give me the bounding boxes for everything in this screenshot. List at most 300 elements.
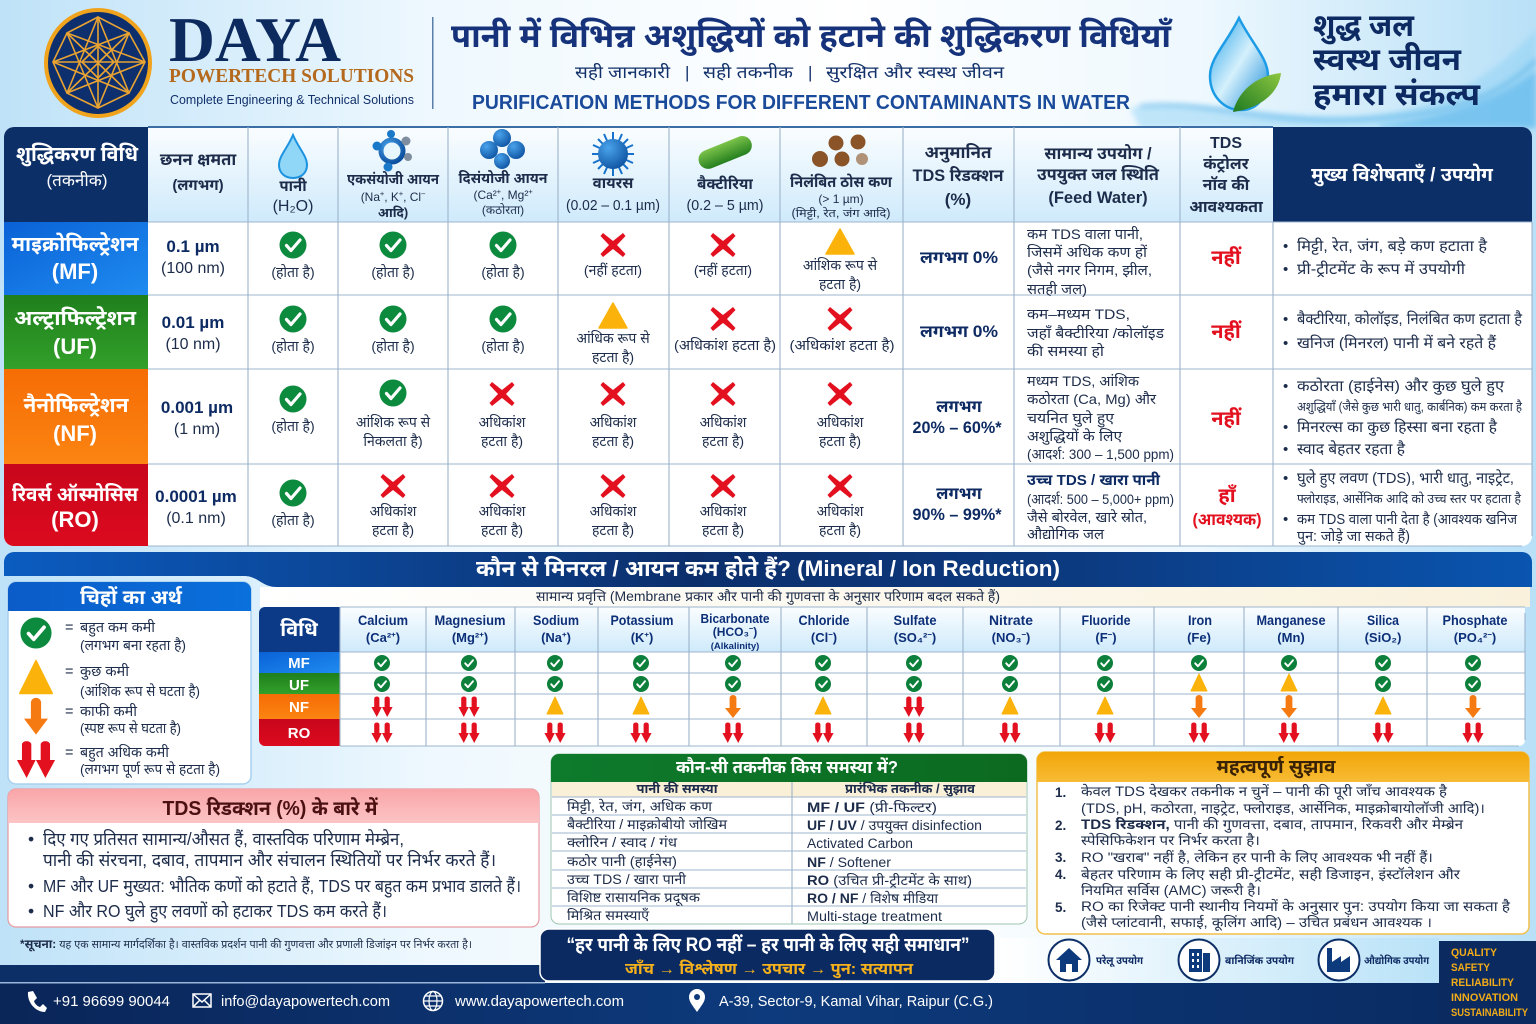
UF row marks: (होता है) <box>371 338 415 354</box>
suggestion list: केवल TDS देखकर तकनीक न चुनें – पानी की पूरी जाँच आवश्यक है <box>1081 782 1448 801</box>
UF mineral marks <box>374 674 1481 692</box>
column: TDS controller: कंट्रोलर <box>1203 155 1250 173</box>
UF row marks: आंधिक रूप से <box>576 329 650 346</box>
main title: | <box>685 63 689 82</box>
UF row marks: (अधिकांश हटता है) <box>674 337 776 353</box>
mineral column headers: Sodium <box>533 612 579 628</box>
mineral column headers <box>358 612 1508 652</box>
method column cells: UF <box>289 677 309 694</box>
RO mineral marks <box>371 722 1484 743</box>
row label: NF: (NF) <box>53 421 97 446</box>
slogan box: जाँच → विश्लेषण → उपचार → पुन: सत्यापन <box>625 959 914 979</box>
feed water text: जैसे बोरवेल, खारे स्रोत, <box>1027 508 1147 525</box>
icon: commercial use: बानिजिंक उपयोग <box>1225 954 1295 967</box>
RO row marks: हटता है) <box>702 522 744 538</box>
main features bullets: • <box>1283 511 1288 528</box>
feed water text: (आदर्श: 300 – 1,500 ppm) <box>1027 446 1174 462</box>
main features bullets: • <box>1283 419 1288 436</box>
contact: website: www.dayapowertech.com <box>454 994 624 1010</box>
TDS reduction values: 90% – 99%* <box>912 506 1002 524</box>
suggested technologies: RO / NF / विशेष मीडिया <box>807 889 939 906</box>
TDS reduction values: लगभग 0% <box>920 323 998 341</box>
column: general use: (Feed Water) <box>1048 189 1148 207</box>
use cases strip <box>1048 940 1429 980</box>
icon: industrial use <box>1318 940 1429 980</box>
UF row marks: (होता है) <box>271 338 315 354</box>
legend: orange arrow: काफी कमी <box>80 703 137 720</box>
slogan top right: शुद्ध जल <box>1313 8 1415 45</box>
filtration capacity values: (1 nm) <box>174 421 220 438</box>
MF row marks: हटता है) <box>819 276 861 292</box>
mineral column headers: Chloride <box>798 612 850 628</box>
column: suspended solids: निलंबित ठोस कण <box>790 174 893 191</box>
footer band <box>0 965 1536 1024</box>
MF row marks: (नहीं हटता) <box>694 262 752 278</box>
brand name: DAYA <box>169 4 341 75</box>
main title: | <box>808 63 812 82</box>
column: divalent ions: (Ca²⁺, Mg²⁺ <box>473 188 533 202</box>
suggestion list: 4. <box>1055 867 1066 882</box>
RO row marks: हटता है) <box>481 522 523 538</box>
brand name <box>169 4 414 107</box>
values box <box>1439 941 1536 1024</box>
column: monovalent ions: आदि) <box>378 205 408 220</box>
main features bullets: बैक्टीरिया, कोलॉइड, निलंबित कण हटाता है <box>1297 311 1523 328</box>
mineral column headers: Silica <box>1367 612 1399 628</box>
feed water text: उच्च TDS / खारा पानी <box>1027 472 1161 489</box>
NF row marks: हटता है) <box>592 433 634 449</box>
main title: सही जानकारी <box>575 62 671 82</box>
water problems: क्लोरिन / स्वाद / गंध <box>567 834 678 850</box>
legend: orange arrow <box>24 698 181 736</box>
column: TDS reduction: अनुमानित <box>924 142 992 163</box>
NF row marks: हटता है) <box>481 433 523 449</box>
mineral column headers: (PO₄²⁻) <box>1454 630 1496 645</box>
mineral column headers: (K⁺) <box>631 630 653 645</box>
panel: important suggestions: महत्वपूर्ण सुझाव <box>1217 755 1336 779</box>
main title: सही तकनीक <box>703 62 794 82</box>
panel: legend <box>8 582 251 784</box>
MF row marks: (होता है) <box>271 264 315 280</box>
TDS note bullets: • <box>28 876 34 896</box>
main features bullets: प्री-ट्रीटमेंट के रूप में उपयोगी <box>1297 260 1466 278</box>
suggestion list: बेहतर परिणाम के लिए सही प्री-ट्रीटमेंट, सही डिजाइन, इंस्टॉलेशन और <box>1081 865 1461 883</box>
NF row marks: निकलता है) <box>363 433 423 449</box>
NF row marks: हटता है) <box>819 433 861 449</box>
suggested technologies: Multi-stage treatment <box>807 909 942 924</box>
feed water text: जहाँ बैक्टीरिया /कोलॉइड <box>1027 324 1165 341</box>
method column cells <box>259 607 340 746</box>
suggestion list: (TDS, pH, कठोरता, नाइट्रेट, फ्लोराइड, आर्सेनिक, माइक्रोबायोलॉजी आदि)। <box>1081 799 1485 817</box>
RO row marks: (होता है) <box>271 512 315 528</box>
TDS note bullets: • <box>28 901 34 921</box>
row label: MF: माइक्रोफिल्ट्रेशन <box>12 232 140 256</box>
row label: MF: (MF) <box>52 259 98 284</box>
method column cells: NF <box>289 699 309 716</box>
column: general use: उपयुक्त जल स्थिति <box>1037 166 1160 185</box>
RO row marks <box>271 474 864 538</box>
column: divalent ions <box>458 129 548 217</box>
TDS note bullets: MF और UF मुख्यत: भौतिक कणों को हटाते हैं, TDS पर बहुत कम प्रभाव डालते हैं। <box>43 875 521 898</box>
feed water text <box>1027 226 1174 542</box>
feed water text: मध्यम TDS, आंशिक <box>1027 373 1139 389</box>
heading: filtration capacity: छनन क्षमता <box>160 151 237 169</box>
MF row marks <box>271 229 878 292</box>
main features bullets: फ्लोराइड, आर्सेनिक आदि को उच्च स्तर पर हटाता है <box>1297 491 1522 506</box>
panel: main comparison table <box>4 126 1532 546</box>
mineral column headers: (SO₄²⁻) <box>894 630 936 645</box>
method column cells: विधि <box>280 617 319 641</box>
RO row marks: अधिकांश <box>479 503 526 519</box>
TDS controller values: हाँ <box>1218 483 1237 507</box>
column: bacteria <box>686 133 764 214</box>
water problems: मिश्रित समस्याएँ <box>567 906 650 923</box>
mineral column headers: (Mn) <box>1277 630 1305 645</box>
suggested technologies: Activated Carbon <box>807 836 913 851</box>
mineral column headers: Fluoride <box>1082 612 1131 628</box>
method column cells: RO <box>288 725 311 742</box>
mineral column headers: Nitrate <box>989 612 1033 628</box>
main features bullets: कठोरता (हाईनेस) और कुछ घुले हुए <box>1297 377 1505 396</box>
contact: website <box>424 992 624 1010</box>
mineral column headers: Phosphate <box>1442 612 1508 628</box>
TDS note bullets: दिए गए प्रतिसत सामान्य/औसत हैं, वास्तविक परिणाम मेम्ब्रेन, <box>43 828 404 849</box>
NF row marks <box>271 380 864 449</box>
RO row marks: हटता है) <box>592 522 634 538</box>
contact: address: A-39, Sector-9, Kamal Vihar, Raipur (C.G.) <box>719 994 993 1010</box>
suggested technologies: UF / UV / उपयुक्त disinfection <box>807 818 982 835</box>
filtration capacity values: 0.001 µm <box>161 398 233 417</box>
mineral column headers: (SiO₂) <box>1365 630 1401 645</box>
main features bullets: मिनरल्स का कुछ हिस्सा बना रहता है <box>1297 419 1498 437</box>
column: monovalent ions: (Na⁺, K⁺, Cl⁻ <box>361 190 426 204</box>
main features bullets: • <box>1283 470 1288 487</box>
brand name: Complete Engineering & Technical Solutions <box>170 93 414 107</box>
mineral column headers: (Cl⁻) <box>811 630 837 645</box>
UF row marks: हटता है) <box>592 349 634 365</box>
mineral column headers: Potassium <box>610 612 674 628</box>
heading: method: (तकनीक) <box>47 170 107 190</box>
feed water text: चयनित घुले हुए <box>1027 409 1114 428</box>
mineral column headers: (NO₃⁻) <box>992 630 1030 645</box>
problem table heads: पानी की समस्या <box>636 781 719 796</box>
TDS controller values: नहीं <box>1211 320 1242 343</box>
MF row marks: (होता है) <box>481 264 525 280</box>
suggestion list: RO का रिजेक्ट पानी स्थानीय नियमों के अनुसार पुन: उपयोग किया जा सकता है <box>1081 897 1511 916</box>
column: virus <box>566 132 660 214</box>
column: TDS reduction: TDS रिडक्शन <box>912 165 1004 185</box>
MF row marks: (नहीं हटता) <box>584 262 642 278</box>
values box: SAFETY <box>1451 962 1491 974</box>
main features bullets: कम TDS वाला पानी देता है (आवश्यक खनिज <box>1297 510 1517 528</box>
suggested technologies: NF / Softener <box>807 855 892 870</box>
legend: orange arrow: = <box>65 704 73 720</box>
row label: MF <box>4 222 148 295</box>
filtration capacity values: (10 nm) <box>165 336 221 353</box>
problem table heads <box>636 781 976 798</box>
heading: filtration capacity <box>160 151 237 194</box>
TDS reduction values: लगभग <box>936 398 983 416</box>
panel: mineral ion reduction banner: कौन से मिनरल / आयन कम होते हैं? (Mineral / Ion Reduction) <box>476 556 1060 581</box>
table grid lines <box>148 127 1532 546</box>
mineral column headers: (Mg²⁺) <box>452 630 488 645</box>
slogan top right <box>1313 8 1481 112</box>
legend: red double arrow: (लगभग पूर्ण रूप से हटता है) <box>80 760 220 779</box>
mineral table subtitle strip <box>260 587 1530 607</box>
TDS reduction values: 20% – 60%* <box>912 419 1002 437</box>
panel: which technology for which problem: कौन-सी तकनीक किस समस्या में? <box>676 757 898 777</box>
chart: mineral matrix <box>259 607 1525 746</box>
header: water splash <box>1130 30 1536 128</box>
MF row marks: आंशिक रूप से <box>803 256 878 273</box>
contact: address <box>689 989 993 1012</box>
legend: triangle: कुछ कमी <box>80 663 129 681</box>
UF row marks: (होता है) <box>481 338 525 354</box>
filtration capacity values: (100 nm) <box>161 260 225 277</box>
column: TDS controller: TDS <box>1210 135 1242 152</box>
main features bullets <box>1283 237 1523 546</box>
icon: commercial use <box>1178 940 1295 980</box>
slogan box: “हर पानी के लिए RO नहीं – हर पानी के लिए सही समाधान” <box>566 933 970 956</box>
RO row marks: हटता है) <box>372 522 414 538</box>
panel: legend: चिहों का अर्थ <box>80 585 183 609</box>
main features bullets: • <box>1283 378 1288 395</box>
legend: red double arrow: = <box>65 745 73 761</box>
row label: NF: नैनोफिल्ट्रेशन <box>24 393 130 417</box>
mineral column headers: (Ca²⁺) <box>366 630 400 645</box>
panel: which technology for which problem <box>551 754 1027 924</box>
mineral column headers: (Alkalinity) <box>711 641 759 652</box>
suggestion list: 2. <box>1055 818 1066 833</box>
suggestion list: TDS रिडक्शन, पानी की गुणवत्ता, दबाव, तापमान, रिकवरी और मेम्ब्रेन <box>1081 815 1464 834</box>
suggestion list: 5. <box>1055 900 1066 915</box>
slogan top right: स्वस्थ जीवन <box>1313 42 1462 77</box>
heading: method: शुद्धिकरण विधि <box>16 142 138 167</box>
row label: RO: रिवर्स ऑस्मोसिस <box>12 482 139 506</box>
legend: triangle: = <box>65 664 73 680</box>
icon: domestic use <box>1048 940 1143 980</box>
NF row marks: आंशिक रूप से <box>356 413 431 430</box>
row label: UF <box>4 295 148 369</box>
column: bacteria: बैक्टीरिया <box>697 175 753 193</box>
TDS note bullets: पानी की संरचना, दबाव, तापमान और संचालन स्थितियों पर निर्भर करते हैं। <box>43 849 496 870</box>
column: TDS controller: नॉव की <box>1203 175 1250 194</box>
RO row marks: हटता है) <box>819 522 861 538</box>
feed water text: अशुद्धियों के लिए <box>1027 427 1122 446</box>
filtration capacity values <box>155 237 237 527</box>
feed water text: कम–मध्यम TDS, <box>1027 306 1130 322</box>
column: bacteria: (0.2 – 5 µm) <box>686 198 764 214</box>
mineral column headers: Magnesium <box>434 612 506 628</box>
TDS reduction values: लगभग <box>936 485 983 503</box>
suggestion list <box>1055 782 1511 932</box>
filtration capacity values: 0.0001 µm <box>155 487 237 506</box>
slogan top right: हमारा संकल्प <box>1313 77 1481 112</box>
suggested technologies: MF / UF (प्री-फिल्टर) <box>807 799 937 815</box>
column: virus: वायरस <box>593 175 634 192</box>
mineral column headers: Sulfate <box>894 612 937 628</box>
mineral column headers: (Na⁺) <box>541 630 571 645</box>
column: monovalent ions: एकसंयोजी आयन <box>347 171 439 187</box>
icon: industrial use: औद्योगिक उपयोग <box>1364 954 1429 967</box>
feed water text: कम TDS वाला पानी, <box>1027 226 1143 242</box>
water problems: मिट्टी, रेत, जंग, अधिक कण <box>567 797 712 815</box>
main features bullets: • <box>1283 335 1288 352</box>
UF row marks <box>271 303 894 365</box>
main features bullets: मिट्टी, रेत, जंग, बड़े कण हटाता है <box>1297 237 1488 255</box>
column: suspended solids <box>790 134 893 220</box>
footnote: *सूचना: यह एक सामान्य मार्गदर्शिका है। वास्तविक प्रदर्शन पानी की गुणवत्ता और प्रणाली डिजांइन पर निर्भर करता है। <box>20 937 472 952</box>
panel: TDS reduction note <box>8 789 539 927</box>
TDS controller values: (आवश्यक) <box>1192 510 1262 529</box>
feed water text: (आदर्श: 500 – 5,000+ ppm) <box>1027 491 1174 507</box>
column: water: पानी <box>279 178 307 195</box>
TDS note bullets: • <box>28 829 34 849</box>
suggested technologies: RO (उचित प्री-ट्रीटमेंट के साथ) <box>807 871 972 889</box>
legend: strong check: (लगभग बना रहता है) <box>80 637 186 653</box>
contact: phone <box>28 991 170 1012</box>
column: main features: मुख्य विशेषताएँ / उपयोग <box>1311 163 1494 187</box>
feed water text: कठोरता (Ca, Mg) और <box>1027 391 1156 407</box>
legend: strong check <box>20 617 186 653</box>
TDS controller values: नहीं <box>1211 407 1242 430</box>
use cases strip background <box>1000 938 1439 983</box>
main features bullets: घुले हुए लवण (TDS), भारी धातु, नाइट्रेट, <box>1297 469 1514 488</box>
legend: red double arrow <box>17 741 220 779</box>
legend: triangle <box>20 661 200 699</box>
TDS reduction values <box>912 249 1002 524</box>
mineral column headers: Manganese <box>1256 612 1326 628</box>
column: divalent ions: दिसंयोजी आयन <box>458 170 548 186</box>
column: monovalent ions <box>347 130 439 220</box>
filtration capacity values: (0.1 nm) <box>166 510 226 527</box>
row label: RO <box>4 464 148 546</box>
row label: RO: (RO) <box>51 507 99 532</box>
feed water text: सतही जल) <box>1027 281 1087 297</box>
suggested technologies <box>807 799 982 924</box>
legend: strong check: बहुत कम कमी <box>80 619 155 637</box>
column: water <box>273 135 313 215</box>
TDS controller values: नहीं <box>1211 246 1242 269</box>
slogan box <box>540 929 995 981</box>
icon: domestic use: परेलू उपयोग <box>1096 953 1143 968</box>
column: TDS reduction: (%) <box>945 190 971 209</box>
suggestion list: नियमित सर्विस (AMC) जरूरी है। <box>1081 882 1261 898</box>
icon: water drop with leaf <box>1210 18 1281 112</box>
legend: orange arrow: (स्पष्ट रूप से घटता है) <box>80 719 181 736</box>
mineral column headers: (Fe) <box>1187 630 1211 645</box>
MF mineral marks <box>374 655 1481 671</box>
row label: NF <box>4 369 148 464</box>
column: water: (H₂O) <box>273 198 313 215</box>
values box: QUALITY <box>1451 947 1498 959</box>
mineral column headers: Iron <box>1188 612 1212 628</box>
water problems: बैक्टीरिया / माइक्रोबीयो जोखिम <box>567 816 728 832</box>
feed water text: औद्योगिक जल <box>1027 526 1105 542</box>
column: TDS controller <box>1189 135 1263 216</box>
NF row marks: हटता है) <box>702 433 744 449</box>
feed water text: (जैसे नगर निगम, झील, <box>1027 261 1152 278</box>
main features bullets: पुन: जोड़े जा सकते हैं) <box>1297 527 1410 546</box>
TDS reduction values: लगभग 0% <box>920 249 998 267</box>
legend: red double arrow: बहुत अधिक कमी <box>80 744 169 762</box>
RO row marks: अधिकांश <box>370 503 417 519</box>
column: general use: सामान्य उपयोग / <box>1044 145 1152 163</box>
main features bullets: स्वाद बेहतर रहता है <box>1297 440 1406 458</box>
row label: UF: अल्ट्राफिल्ट्रेशन <box>14 306 137 330</box>
suggestion list: स्पेसिफिकेशन पर निर्भर करता है। <box>1081 831 1260 848</box>
NF row marks: अधिकांश <box>590 414 637 430</box>
feed water text: की समस्या हो <box>1027 343 1104 359</box>
legend: strong check: = <box>65 620 73 636</box>
main features bullets: • <box>1283 261 1288 278</box>
main title: पानी में विभिन्न अशुद्धियों को हटाने की शुद्धिकरण विधियाँ <box>451 16 1173 57</box>
RO row marks: अधिकांश <box>590 503 637 519</box>
panel: mineral ion reduction banner <box>4 552 1532 587</box>
column: virus: (0.02 – 0.1 µm) <box>566 198 660 214</box>
NF mineral marks <box>371 695 1481 718</box>
values box: INNOVATION <box>1451 992 1518 1004</box>
mineral column headers: Bicarbonate <box>700 612 770 626</box>
column: divalent ions: (कठोरता) <box>482 202 524 217</box>
column: TDS reduction <box>912 142 1004 209</box>
TDS note bullets: NF और RO घुले हुए लवणों को हटाकर TDS कम करते हैं। <box>43 900 387 923</box>
main features bullets: • <box>1283 311 1288 328</box>
contact: email: info@dayapowertech.com <box>221 994 390 1010</box>
problem table heads: प्रारंभिक तकनीक / सुझाव <box>845 781 976 798</box>
mineral column headers: Calcium <box>358 612 408 628</box>
water problems <box>567 797 728 923</box>
water problems: विशिष्ट रासायनिक प्रदूषक <box>567 889 701 906</box>
filtration capacity values: 0.1 µm <box>166 237 220 256</box>
mineral column headers: (F⁻) <box>1095 630 1117 645</box>
column: general use <box>1037 145 1160 207</box>
brand name: POWERTECH SOLUTIONS <box>169 65 414 87</box>
main features bullets: खनिज (मिनरल) पानी में बने रहते हैं <box>1297 334 1497 352</box>
main features bullets: • <box>1283 238 1288 255</box>
contact: phone: +91 96699 90044 <box>53 994 170 1010</box>
suggestion list: (जैसे प्लांटवानी, सफाई, कूलिंग आदि) – उचित प्रबंधन आवश्यक । <box>1081 913 1432 932</box>
NF row marks: अधिकांश <box>479 414 526 430</box>
main title <box>451 16 1173 114</box>
MF row marks: (होता है) <box>371 264 415 280</box>
TDS note bullets <box>28 828 521 923</box>
RO row marks: अधिकांश <box>817 503 864 519</box>
NF row marks: (होता है) <box>271 418 315 434</box>
column: suspended solids: (मिट्टी, रेत, जंग आदि) <box>792 207 891 220</box>
water problems: कठोर पानी (हाईनेस) <box>567 852 677 869</box>
UF row marks: (अधिकांश हटता है) <box>790 337 894 353</box>
suggestion list: 3. <box>1055 850 1066 865</box>
RO row marks: अधिकांश <box>700 503 747 519</box>
main features bullets: • <box>1283 441 1288 458</box>
main title: सुरक्षित और स्वस्थ जीवन <box>826 62 1005 84</box>
logo emblem <box>46 10 150 116</box>
table header row <box>4 126 1532 222</box>
heading: filtration capacity: (लगभग) <box>172 177 224 194</box>
feed water text: जिसमें अधिक कण हों <box>1027 244 1147 260</box>
NF row marks: अधिकांश <box>817 414 864 430</box>
TDS controller values <box>1192 246 1262 529</box>
NF row marks: अधिकांश <box>700 414 747 430</box>
values box: RELIABILITY <box>1451 977 1515 989</box>
mineral column headers: (HCO₃⁻) <box>713 625 757 639</box>
mineral table subtitle strip: सामान्य प्रवृत्ति (Membrane प्रकार और पानी की गुणवत्ता के अनुसार परिणाम बदल सकते हैं) <box>536 587 1000 606</box>
heading: method <box>16 142 138 190</box>
main title: PURIFICATION METHODS FOR DIFFERENT CONTAMINANTS IN WATER <box>472 92 1131 114</box>
panel: important suggestions <box>1037 752 1529 934</box>
row label: UF: (UF) <box>53 334 97 359</box>
